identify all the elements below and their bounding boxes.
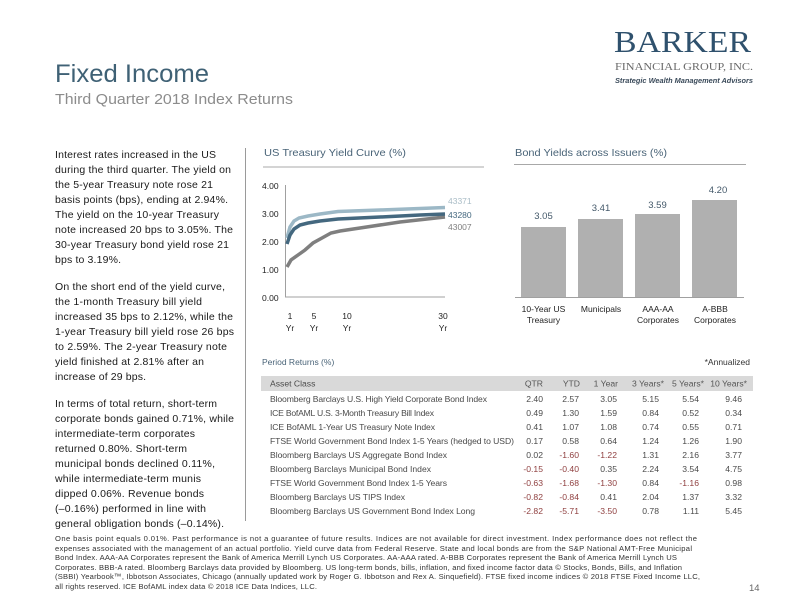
row: FTSE: 0.84 bbox=[642, 478, 659, 488]
text block: commentary bbox=[54, 149, 234, 530]
table caption: Period Returns (%) bbox=[262, 357, 334, 367]
paragraph: short end of curve: increased 35 bps to 2.12%, while the bbox=[55, 311, 233, 323]
row: Government Long: 5.45 bbox=[725, 506, 742, 516]
bar values: 3.05 bbox=[534, 211, 553, 222]
row: 1-Year Note: 0.55 bbox=[682, 422, 699, 432]
paragraph: total return: intermediate-term corporates bbox=[55, 428, 195, 440]
table header: 3 Years* bbox=[632, 378, 665, 388]
paragraph: yield changes: note increased 20 bps to 3.05%. The bbox=[55, 224, 233, 236]
paragraph: short end of curve: to 2.59%. The 2-year Treasury note bbox=[55, 341, 227, 353]
row: Municipal: -0.40 bbox=[559, 464, 579, 474]
row: TIPS bbox=[270, 492, 742, 502]
row: Government Long: -3.50 bbox=[597, 506, 617, 516]
row: 1-Year Note: 0.74 bbox=[642, 422, 659, 432]
row: 3-Month T-Bill bbox=[270, 408, 742, 418]
chart title: Bond Yields across Issuers (%) bbox=[515, 147, 667, 159]
row: Municipal: -0.15 bbox=[523, 464, 543, 474]
row: US Aggregate bbox=[270, 450, 742, 460]
row: FTSE bbox=[270, 478, 742, 488]
x axis labels: Yr bbox=[439, 323, 447, 333]
row: FTSE: -1.68 bbox=[559, 478, 579, 488]
row: TIPS: -0.84 bbox=[559, 492, 579, 502]
paragraph: total return bbox=[54, 398, 234, 530]
paragraph: total return: corporate bonds gained 0.71%, while bbox=[55, 413, 234, 425]
paragraph: short end of curve: yield finished at 2.81% after an bbox=[55, 356, 204, 368]
row: US High Yield bbox=[270, 394, 742, 404]
row: US High Yield: 2.40 bbox=[526, 394, 543, 404]
row: 3-Month T-Bill: ICE BofAML U.S. 3-Month Treasury Bill Index bbox=[270, 408, 435, 418]
row: Government Long: Bloomberg Barclays US Government Bond Index Long bbox=[270, 506, 475, 516]
table header bbox=[261, 376, 753, 391]
bar values: 4.20 bbox=[709, 185, 727, 196]
row: FTSE: -0.63 bbox=[523, 478, 543, 488]
paragraph: total return: returned 0.80%. Short-term bbox=[55, 443, 187, 455]
series labels: 43007 bbox=[448, 222, 472, 232]
line: 43007 bbox=[287, 217, 445, 267]
x axis labels: 1 bbox=[288, 311, 293, 321]
row: US High Yield: 9.46 bbox=[725, 394, 742, 404]
footnote: expenses associated with the management of an actual portfolio. Yield curve data from Federal Reserve. State and local bonds are from the S&P National AMT-Free Municipal bbox=[55, 544, 692, 553]
bar labels bbox=[522, 304, 736, 325]
row: FTSE hedged: 1.26 bbox=[682, 436, 699, 446]
paragraph: yield changes bbox=[55, 149, 233, 266]
row: US High Yield: 2.57 bbox=[562, 394, 579, 404]
paragraph: short end of curve: On the short end of the yield curve, bbox=[55, 281, 225, 293]
row: 3-Month T-Bill: 0.34 bbox=[725, 408, 742, 418]
row: US Aggregate: 3.77 bbox=[725, 450, 742, 460]
row: US High Yield: 5.54 bbox=[682, 394, 699, 404]
row: Government Long: -2.82 bbox=[523, 506, 543, 516]
row: Municipal: Bloomberg Barclays Municipal Bond Index bbox=[270, 464, 432, 474]
row: 1-Year Note: 1.08 bbox=[600, 422, 617, 432]
row: FTSE hedged: 1.90 bbox=[725, 436, 742, 446]
logo: Barker Financial Group: BARKER bbox=[614, 24, 751, 59]
table header: QTR bbox=[525, 378, 543, 388]
row: Municipal: 2.24 bbox=[642, 464, 659, 474]
row: Municipal bbox=[270, 464, 742, 474]
bar labels: Corporates bbox=[637, 315, 679, 325]
paragraph: total return: In terms of total return, short-term bbox=[55, 398, 217, 410]
row: US Aggregate: 2.16 bbox=[682, 450, 699, 460]
row: US Aggregate: 1.31 bbox=[642, 450, 659, 460]
row: 3-Month T-Bill: 1.59 bbox=[600, 408, 617, 418]
row: FTSE: -1.16 bbox=[679, 478, 699, 488]
row: TIPS: 3.32 bbox=[725, 492, 742, 502]
row: TIPS: Bloomberg Barclays US TIPS Index bbox=[270, 492, 406, 502]
chart: US Treasury yield curve bbox=[262, 147, 484, 333]
paragraph: total return: general obligation bonds (–0.14%). bbox=[55, 518, 224, 530]
row: Government Long bbox=[270, 506, 742, 516]
row: Municipal: 4.75 bbox=[725, 464, 742, 474]
row: 3-Month T-Bill: 0.49 bbox=[526, 408, 543, 418]
paragraph: yield changes: Interest rates increased in the US bbox=[55, 149, 216, 161]
x axis labels: Yr bbox=[310, 323, 318, 333]
row: 3-Month T-Bill: 0.84 bbox=[642, 408, 659, 418]
row: US Aggregate: 0.02 bbox=[526, 450, 543, 460]
series labels: 43280 bbox=[448, 210, 472, 220]
y axis labels: 2.00 bbox=[262, 237, 279, 247]
table header: 10 Years* bbox=[710, 378, 748, 388]
paragraph: yield changes: bps to 3.19%. bbox=[55, 254, 121, 266]
row: FTSE hedged: 1.24 bbox=[642, 436, 659, 446]
title: Fixed Income bbox=[55, 60, 209, 88]
row: Government Long: -5.71 bbox=[559, 506, 579, 516]
bar labels: A-BBB bbox=[702, 304, 728, 314]
table header: 5 Years* bbox=[672, 378, 705, 388]
y axis labels: 3.00 bbox=[262, 209, 279, 219]
row: TIPS: 0.41 bbox=[600, 492, 617, 502]
bar labels: Corporates bbox=[694, 315, 736, 325]
page number: 14 bbox=[749, 583, 760, 594]
bar labels: Treasury bbox=[527, 315, 561, 325]
bar values bbox=[534, 185, 727, 222]
paragraph: yield changes: the 5-year Treasury note rose 21 bbox=[55, 179, 213, 191]
row: 1-Year Note: ICE BofAML 1-Year US Treasury Note Index bbox=[270, 422, 436, 432]
paragraph: total return: municipal bonds declined 0.11%, bbox=[55, 458, 215, 470]
bar labels: 10-Year US bbox=[522, 304, 566, 314]
y axis labels: 4.00 bbox=[262, 181, 279, 191]
annualized note: *Annualized bbox=[705, 357, 750, 367]
bar labels: Municipals bbox=[581, 304, 621, 314]
x axis labels: 10 bbox=[342, 311, 352, 321]
row: US Aggregate: -1.22 bbox=[597, 450, 617, 460]
row: US Aggregate: -1.60 bbox=[559, 450, 579, 460]
row: FTSE hedged: 0.64 bbox=[600, 436, 617, 446]
paragraph: short end of curve bbox=[55, 281, 234, 383]
y axis labels: 1.00 bbox=[262, 265, 279, 275]
bar labels: AAA-AA bbox=[642, 304, 674, 314]
row: Government Long: 0.78 bbox=[642, 506, 659, 516]
footnote: One basis point equals 0.01%. Past performance is not a guarantee of future results. Indices are not available for direct investment. Index performance does not reflect the bbox=[55, 534, 697, 543]
row: 3-Month T-Bill: 1.30 bbox=[562, 408, 579, 418]
row: FTSE: -1.30 bbox=[597, 478, 617, 488]
series labels bbox=[448, 196, 472, 232]
paragraph: short end of curve: 1-year Treasury bill yield rose 26 bps bbox=[55, 326, 234, 338]
x axis labels: 5 bbox=[312, 311, 317, 321]
bars bbox=[521, 200, 737, 297]
row: Government Long: 1.11 bbox=[683, 506, 699, 516]
row: FTSE hedged: 0.17 bbox=[526, 436, 543, 446]
row: US High Yield: 5.15 bbox=[642, 394, 659, 404]
subtitle: Third Quarter 2018 Index Returns bbox=[55, 92, 293, 108]
row: FTSE: 0.98 bbox=[725, 478, 742, 488]
row: TIPS: 2.04 bbox=[642, 492, 659, 502]
paragraph: total return: dipped 0.06%. Revenue bonds bbox=[55, 488, 204, 500]
line: 43371 bbox=[287, 208, 445, 238]
chart title: US Treasury Yield Curve (%) bbox=[264, 147, 406, 159]
x axis labels: 30 bbox=[438, 311, 448, 321]
row: Municipal: 0.35 bbox=[600, 464, 617, 474]
x axis labels bbox=[286, 311, 448, 333]
y axis labels: 0.00 bbox=[262, 293, 279, 303]
footnote: all rights reserved. ICE BofAML index data © 2018 ICE Data Indices, LLC. bbox=[55, 582, 317, 591]
row: 3-Month T-Bill: 0.52 bbox=[682, 408, 699, 418]
bar values: 3.41 bbox=[592, 203, 610, 214]
logo: Barker Financial Group bbox=[614, 24, 753, 85]
table header: 1 Year bbox=[594, 378, 618, 388]
row: FTSE: FTSE World Government Bond Index 1-5 Years bbox=[270, 478, 447, 488]
table: period returns bbox=[261, 357, 753, 516]
footnote: (SBBI) Yearbook™, Ibbotson Associates, Chicago (annually updated work by Roger G. Ibbotson and Rex A. Sinquefield). FTSE fixed income indices © 2018 FTSE Fixed Income LLC, bbox=[55, 572, 700, 581]
logo: Barker Financial Group: FINANCIAL GROUP, INC. bbox=[615, 62, 753, 73]
row: FTSE hedged bbox=[270, 436, 742, 446]
row: 1-Year Note: 0.41 bbox=[526, 422, 543, 432]
footnote: Corporates. BBB-A rated. Bloomberg Barclays data provided by Bloomberg. US long-term bonds, bills, inflation, and fixed income factor data © Stocks, Bonds, Bills, and Inflation bbox=[55, 563, 682, 572]
x axis labels: Yr bbox=[286, 323, 294, 333]
table header: Asset Class bbox=[270, 378, 315, 388]
row: 1-Year Note: 0.71 bbox=[725, 422, 742, 432]
paragraph: total return: (–0.16%) performed in line with bbox=[55, 503, 206, 515]
logo: Barker Financial Group: Strategic Wealth Management Advisors bbox=[615, 76, 753, 85]
bar values: 3.59 bbox=[648, 200, 667, 211]
row: US Aggregate: Bloomberg Barclays US Aggregate Bond Index bbox=[270, 450, 448, 460]
row: Municipal: 3.54 bbox=[682, 464, 699, 474]
row: 1-Year Note bbox=[270, 422, 742, 432]
paragraph: yield changes: The yield on the 10-year Treasury bbox=[55, 209, 220, 221]
table header: YTD bbox=[563, 378, 580, 388]
paragraph: short end of curve: increase of 29 bps. bbox=[55, 371, 146, 383]
row: US High Yield: Bloomberg Barclays U.S. High Yield Corporate Bond Index bbox=[270, 394, 488, 404]
paragraph: total return: while intermediate-term munis bbox=[54, 473, 201, 485]
footnote bbox=[55, 534, 700, 591]
row: US High Yield: 3.05 bbox=[600, 394, 617, 404]
row: 1-Year Note: 1.07 bbox=[562, 422, 579, 432]
paragraph: yield changes: basis points (bps), ending at 2.94%. bbox=[55, 194, 228, 206]
row: FTSE hedged: FTSE World Government Bond Index 1-5 Years (hedged to USD) bbox=[270, 436, 514, 446]
footnote: Bond Index. AAA-AA Corporates represent the Bank of America Merrill Lynch US Corporates. AA-AAA rated. A-BBB Corporates represent the Bank of America Merrill Lynch US bbox=[55, 553, 677, 562]
paragraph: yield changes: 30-year Treasury bond yield rose 21 bbox=[55, 239, 229, 251]
row: TIPS: -0.82 bbox=[523, 492, 543, 502]
line: 43280 bbox=[287, 214, 445, 244]
paragraph: short end of curve: the 1-month Treasury bill yield bbox=[55, 296, 202, 308]
chart: bond yields across issuers bbox=[514, 147, 746, 325]
row: TIPS: 1.37 bbox=[682, 492, 699, 502]
series labels: 43371 bbox=[448, 196, 472, 206]
y axis labels bbox=[262, 181, 279, 303]
x axis labels: Yr bbox=[343, 323, 351, 333]
row: FTSE hedged: 0.58 bbox=[562, 436, 579, 446]
paragraph: yield changes: during the third quarter. The yield on bbox=[55, 164, 231, 176]
